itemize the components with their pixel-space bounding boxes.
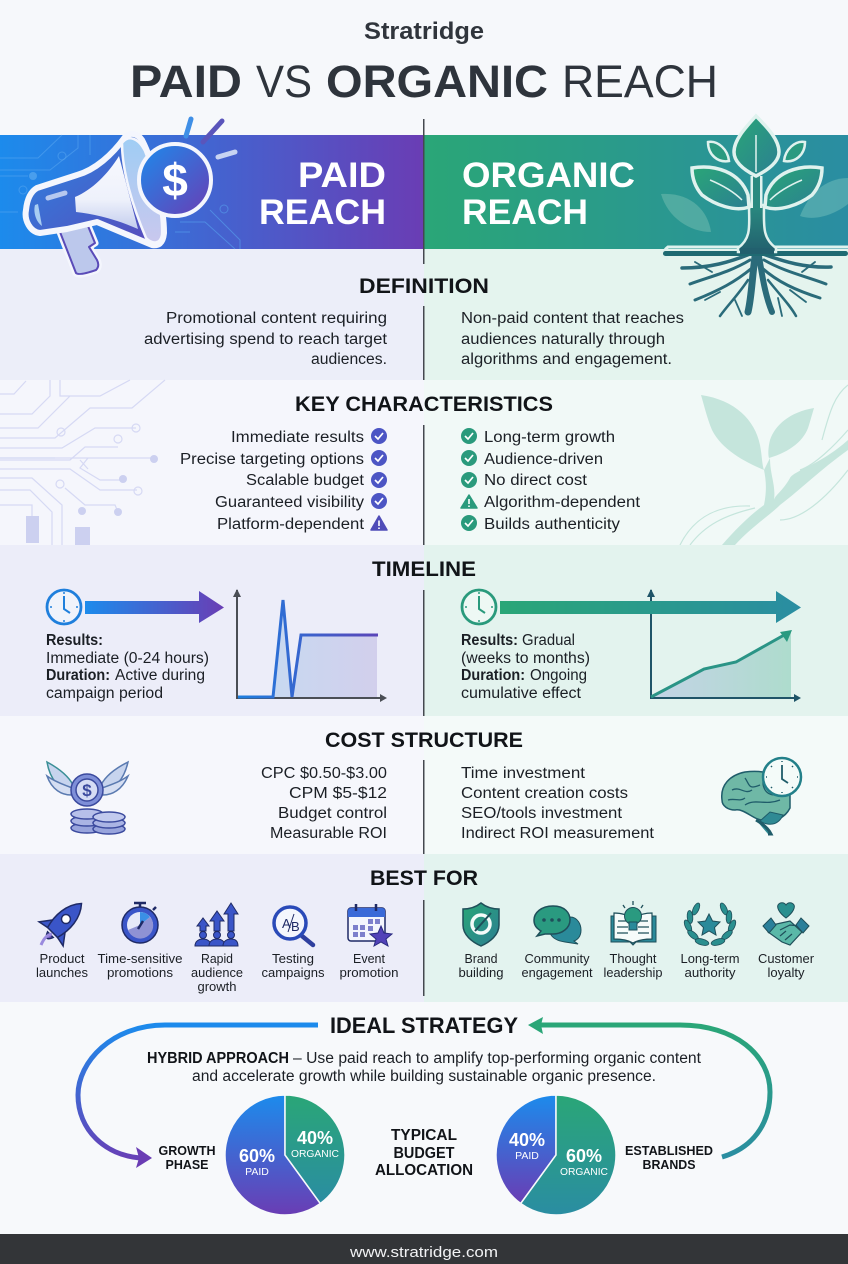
label: growth phase: PHASE bbox=[166, 1158, 208, 1172]
text: paid definition bbox=[144, 310, 388, 368]
item: customer loyalty: Customer bbox=[758, 952, 814, 966]
item: event promotion: Event bbox=[353, 952, 386, 966]
text: hybrid approach bbox=[147, 1050, 702, 1085]
footer: www.stratridge.com bbox=[349, 1244, 498, 1261]
text: paid timeline: Results: bbox=[46, 632, 103, 649]
text: paid timeline bbox=[46, 632, 209, 702]
top leaf bbox=[734, 116, 779, 176]
text: organic definition bbox=[461, 310, 684, 368]
panel: timeline bbox=[0, 545, 848, 716]
list: paid characteristics: Precise targeting options bbox=[180, 451, 364, 468]
title: REACH bbox=[562, 56, 718, 107]
arrow: paid timeline bbox=[85, 591, 224, 623]
arrow: paid loop bbox=[78, 1025, 318, 1168]
text: organic timeline: Results: bbox=[461, 632, 518, 649]
rays bbox=[186, 119, 235, 157]
item: testing campaigns: A bbox=[282, 916, 291, 931]
chart: established brands pie: 60% bbox=[566, 1146, 602, 1166]
item: product launches bbox=[35, 891, 94, 980]
panel label: organic reach: REACH bbox=[462, 193, 588, 232]
chart: growth phase pie: 40% bbox=[297, 1128, 333, 1148]
text: organic timeline: (weeks to months) bbox=[461, 650, 590, 667]
item: time-sensitive promotions bbox=[98, 903, 183, 980]
text: paid timeline: Immediate (0-24 hours) bbox=[46, 650, 209, 667]
item: testing campaigns: Testing bbox=[272, 952, 314, 966]
icon: winged coin stack: $ bbox=[82, 781, 92, 800]
item: brand building: building bbox=[458, 966, 504, 980]
title bbox=[130, 56, 718, 107]
item: long-term authority bbox=[680, 902, 740, 980]
text: paid timeline: campaign period bbox=[46, 685, 163, 702]
chart: established brands pie: ORGANIC bbox=[560, 1166, 608, 1178]
heading: best for: BEST FOR bbox=[370, 867, 478, 890]
item: thought leadership bbox=[604, 901, 663, 980]
roots bbox=[682, 250, 831, 316]
list: organic characteristics: Algorithm-dependent bbox=[484, 494, 641, 511]
list: organic costs bbox=[461, 765, 655, 842]
handle bbox=[60, 226, 98, 274]
item: rapid audience growth: Rapid bbox=[201, 952, 233, 966]
list: paid characteristics: Scalable budget bbox=[246, 472, 365, 489]
item: product launches: launches bbox=[36, 966, 88, 980]
trunk bbox=[738, 205, 776, 252]
panel label: paid reach bbox=[259, 156, 386, 232]
panel: cost structure bbox=[0, 716, 848, 854]
brand name: Stratridge bbox=[364, 18, 484, 45]
icon: tree with roots bbox=[663, 116, 848, 316]
list: organic characteristics: No direct cost bbox=[484, 472, 588, 489]
item: event promotion: promotion bbox=[340, 966, 399, 980]
chart: established brands pie: 40% bbox=[509, 1130, 545, 1150]
chart: growth phase pie: ORGANIC bbox=[291, 1148, 339, 1160]
item: event promotion bbox=[340, 904, 399, 980]
label: typical budget allocation: TYPICAL bbox=[391, 1127, 457, 1144]
panel label: paid reach: PAID bbox=[298, 156, 386, 195]
text: hybrid approach: – Use paid reach to amplify top-performing organic content bbox=[293, 1050, 702, 1067]
right leaf bbox=[765, 167, 822, 209]
text: paid timeline: Duration: bbox=[46, 667, 110, 684]
chart: growth phase pie: PAID bbox=[245, 1166, 269, 1178]
item: testing campaigns bbox=[262, 907, 324, 980]
chart: growth phase pie: 60% bbox=[239, 1146, 275, 1166]
label: growth phase bbox=[158, 1144, 216, 1172]
text: hybrid approach: and accelerate growth while building sustainable organic presence. bbox=[192, 1068, 656, 1085]
list: organic costs: Content creation costs bbox=[461, 785, 628, 802]
ground line bbox=[664, 247, 848, 259]
item: brand building bbox=[458, 903, 504, 980]
text: organic timeline bbox=[461, 632, 590, 702]
horn outline bbox=[26, 134, 164, 245]
heading: ideal strategy: IDEAL STRATEGY bbox=[330, 1013, 518, 1038]
list: organic characteristics bbox=[461, 428, 641, 533]
label: established brands bbox=[625, 1144, 713, 1172]
text: organic definition: algorithms and engagement. bbox=[461, 351, 672, 368]
list: paid characteristics: Immediate results bbox=[231, 429, 364, 446]
decoration: sprout bbox=[701, 395, 848, 545]
text: paid timeline: Active during bbox=[115, 667, 205, 684]
item: testing campaigns: B bbox=[291, 919, 300, 934]
list: paid costs: Measurable ROI bbox=[270, 825, 387, 842]
chart: paid reach over time bbox=[233, 589, 387, 702]
list: paid costs: CPM $5-$12 bbox=[289, 785, 387, 802]
text: paid definition: advertising spend to reach target bbox=[144, 331, 388, 348]
label: typical budget allocation: ALLOCATION bbox=[375, 1162, 473, 1179]
chart: established brands pie: PAID bbox=[515, 1150, 539, 1162]
item: rapid audience growth bbox=[191, 903, 243, 994]
left leaf bbox=[692, 167, 749, 209]
panel: organic banner bbox=[424, 135, 848, 249]
list: paid characteristics: Guaranteed visibility bbox=[215, 494, 364, 511]
list: organic costs: Indirect ROI measurement bbox=[461, 825, 655, 842]
icon: winged coin stack bbox=[47, 762, 128, 834]
item: thought leadership: leadership bbox=[604, 966, 663, 980]
icon: megaphone with dollar coin bbox=[26, 119, 235, 274]
panel: definition bbox=[0, 249, 848, 380]
horn front bbox=[75, 156, 138, 229]
text: organic definition: Non-paid content that reaches bbox=[461, 310, 684, 327]
arrow: organic loop bbox=[528, 1017, 770, 1157]
heading: definition: DEFINITION bbox=[359, 275, 489, 298]
item: rapid audience growth: audience bbox=[191, 966, 243, 980]
title: ORGANIC bbox=[326, 56, 548, 107]
title: VS bbox=[256, 56, 312, 107]
label: growth phase: GROWTH bbox=[158, 1144, 216, 1158]
list: paid characteristics: Platform-dependent bbox=[217, 516, 365, 533]
item: customer loyalty: loyalty bbox=[768, 966, 805, 980]
list: organic characteristics: Builds authenticity bbox=[484, 516, 620, 533]
panel label: organic reach bbox=[462, 156, 635, 232]
item: brand building: Brand bbox=[464, 952, 498, 966]
text: hybrid approach: HYBRID APPROACH bbox=[147, 1050, 289, 1067]
list: paid costs: Budget control bbox=[278, 805, 387, 822]
list: organic characteristics: Long-term growth bbox=[484, 429, 615, 446]
label: typical budget allocation: BUDGET bbox=[394, 1145, 455, 1162]
item: community engagement: engagement bbox=[522, 966, 593, 980]
item: time-sensitive promotions: Time-sensitive bbox=[98, 952, 183, 966]
footer bbox=[0, 1234, 848, 1264]
label: established brands: ESTABLISHED bbox=[625, 1144, 713, 1158]
text: organic timeline: cumulative effect bbox=[461, 685, 582, 702]
list: organic costs: SEO/tools investment bbox=[461, 805, 623, 822]
item: community engagement bbox=[522, 906, 593, 980]
list: organic costs: Time investment bbox=[461, 765, 586, 782]
list: paid costs bbox=[261, 765, 387, 842]
item: long-term authority: authority bbox=[684, 966, 736, 980]
panel: best for bbox=[0, 854, 848, 1002]
chart: organic reach over time bbox=[647, 589, 801, 702]
title: PAID bbox=[130, 56, 242, 107]
label: typical budget allocation bbox=[375, 1127, 473, 1179]
back cap highlight bbox=[34, 204, 42, 226]
arrow: organic timeline bbox=[500, 591, 801, 623]
text: paid definition: Promotional content requiring bbox=[166, 310, 387, 327]
icon: megaphone with dollar coin: $ bbox=[162, 154, 188, 206]
label: established brands: BRANDS bbox=[642, 1158, 696, 1172]
list: organic characteristics: Audience-driven bbox=[484, 451, 603, 468]
item: customer loyalty bbox=[758, 903, 814, 980]
item: community engagement: Community bbox=[524, 952, 590, 966]
icon: paid clock bbox=[47, 590, 81, 624]
coin bbox=[139, 144, 211, 216]
item: testing campaigns: campaigns bbox=[262, 966, 324, 980]
item: long-term authority: Long-term bbox=[680, 952, 740, 966]
item: rapid audience growth: growth bbox=[198, 980, 237, 994]
chart: growth phase pie bbox=[225, 1095, 345, 1215]
center divider: banner bbox=[423, 119, 424, 264]
list: paid characteristics bbox=[180, 428, 387, 533]
text: organic definition: audiences naturally through bbox=[461, 331, 665, 348]
item: time-sensitive promotions: promotions bbox=[107, 966, 173, 980]
icon: brain with clock bbox=[722, 758, 801, 834]
heading: key characteristics: KEY CHARACTERISTICS bbox=[295, 393, 553, 416]
text: organic timeline: Ongoing bbox=[530, 667, 587, 684]
item: thought leadership: Thought bbox=[610, 952, 657, 966]
text: organic timeline: Duration: bbox=[461, 667, 525, 684]
item: product launches: Product bbox=[40, 952, 85, 966]
panel label: paid reach: REACH bbox=[259, 193, 386, 232]
panel: paid banner bbox=[0, 135, 424, 249]
panel: key characteristics bbox=[0, 380, 848, 545]
icon: organic clock bbox=[462, 590, 496, 624]
panel: ideal strategy bbox=[0, 1002, 848, 1234]
list: paid costs: CPC $0.50-$3.00 bbox=[261, 765, 387, 782]
heading: cost structure: COST STRUCTURE bbox=[325, 729, 523, 752]
chart: established brands pie bbox=[496, 1095, 616, 1215]
small leaves bbox=[708, 142, 729, 161]
heading: timeline: TIMELINE bbox=[372, 558, 476, 581]
text: paid definition: audiences. bbox=[311, 351, 387, 368]
bell bbox=[122, 138, 162, 243]
text: organic timeline: Gradual bbox=[522, 632, 575, 649]
panel label: organic reach: ORGANIC bbox=[462, 156, 635, 195]
